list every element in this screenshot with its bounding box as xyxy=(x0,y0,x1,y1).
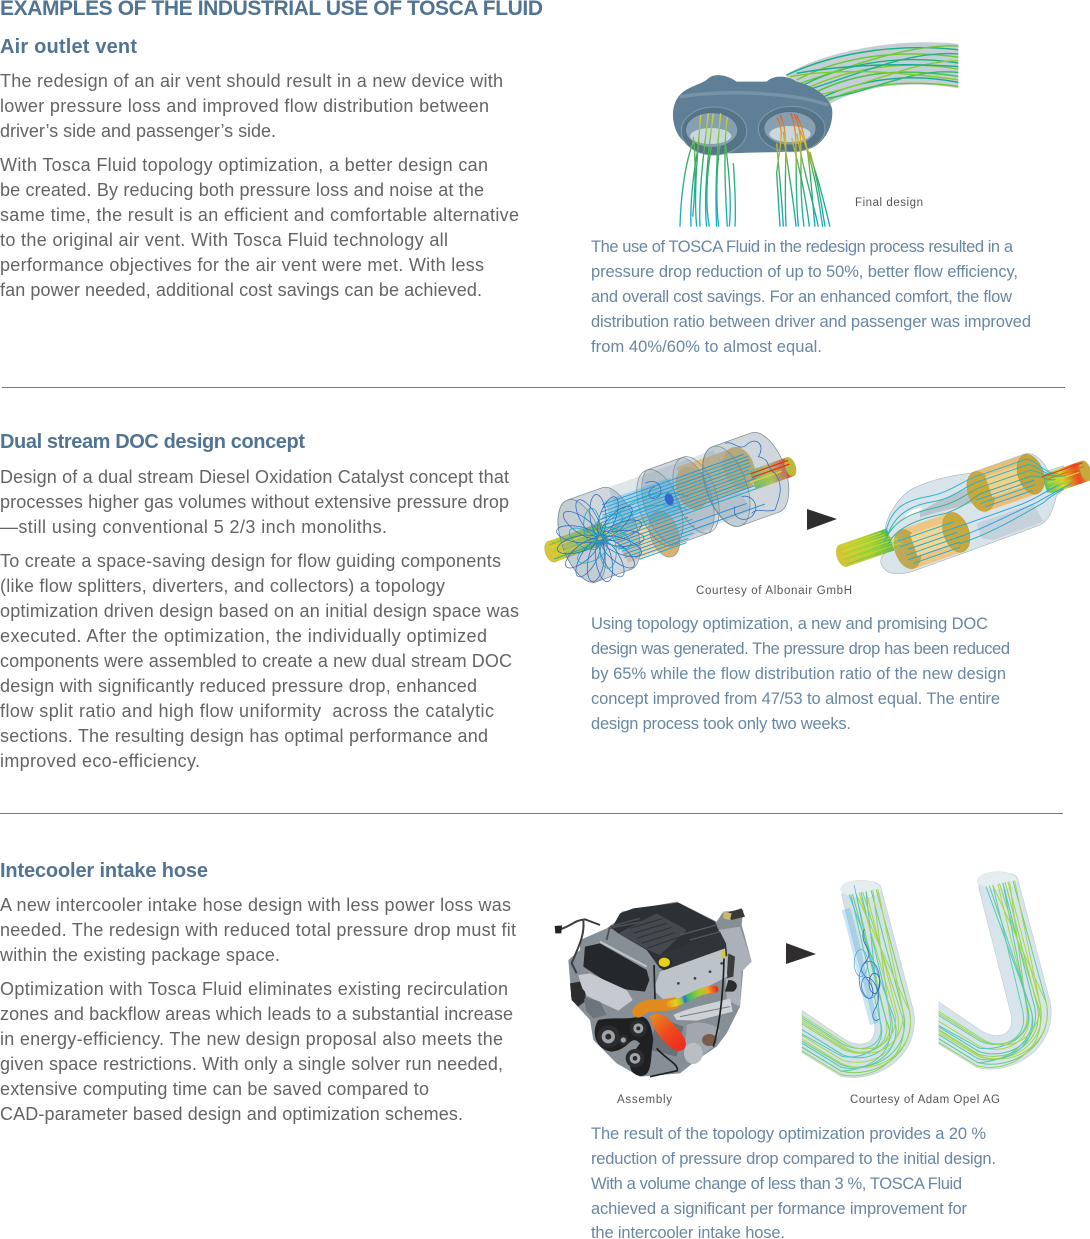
cans xyxy=(548,426,800,588)
illustration: initial DOC design xyxy=(531,423,810,595)
recirculation swirl xyxy=(846,885,880,1024)
text block: air vent description: be created. By reducing both pressure loss and noise at the xyxy=(0,180,484,200)
text block: DOC description: executed. After the optimization, the individually optimized xyxy=(0,626,487,646)
text block: hose result: achieved a significant per formance improvement for xyxy=(591,1200,968,1218)
flow lines xyxy=(542,441,803,586)
connecting light tube xyxy=(608,450,752,562)
text block: air vent description: to the original air vent. With Tosca Fluid technology all xyxy=(0,230,448,250)
text block: hose description: extensive computing time can be saved compared to xyxy=(0,1079,429,1099)
text block: DOC description: To create a space-saving design for flow guiding components xyxy=(0,551,501,571)
text block: hose description: within the existing package space. xyxy=(0,945,280,965)
lower monolith xyxy=(608,510,678,563)
outlet pipe xyxy=(1041,461,1089,495)
text block: DOC description: optimization driven design based on an initial design space was xyxy=(0,601,519,621)
wiring xyxy=(560,919,600,973)
text block: air vent description: same time, the result is an efficient and comfortable alternative xyxy=(0,205,519,225)
text block: DOC description: (like flow splitters, diverters, and collectors) a topology xyxy=(0,576,445,596)
turbo and sump xyxy=(685,1023,720,1060)
text block: DOC description: components were assembled to create a new dual stream DOC xyxy=(0,651,512,671)
heading: air outlet vent: Air outlet vent xyxy=(0,36,137,58)
text block: hose description: Optimization with Tosca Fluid eliminates existing recirculation xyxy=(0,979,508,999)
section: air outlet vent xyxy=(0,36,1031,356)
hose xyxy=(638,1003,674,1012)
text block: air vent description: lower pressure loss and improved flow distribution between xyxy=(0,96,489,116)
text block: DOC result: by 65% while the flow distribution ratio of the new design xyxy=(591,665,1006,683)
text block: DOC description: design with significantly reduced pressure drop, enhanced xyxy=(0,676,477,696)
section: intercooler intake hose xyxy=(0,860,1051,1239)
section: dual stream DOC xyxy=(0,423,1090,771)
text block: DOC result: design process took only two weeks. xyxy=(591,715,851,733)
text block: hose description: needed. The redesign with reduced total pressure drop must fit xyxy=(0,920,516,940)
text block: air vent description: With Tosca Fluid topology optimization, a better design can xyxy=(0,155,488,175)
pipes xyxy=(548,522,609,562)
text block: air vent description: performance objectives for the air vent were met. With less xyxy=(0,255,484,275)
text block: DOC description: Design of a dual stream Diesel Oxidation Catalyst concept that xyxy=(0,467,509,487)
oil cap xyxy=(658,957,672,969)
arrow: DOC process xyxy=(807,509,837,530)
caption: courtesy of Albonair: Courtesy of Albonair GmbH xyxy=(696,585,852,597)
caption: assembly: Assembly xyxy=(617,1094,672,1106)
gap in housing xyxy=(904,508,923,518)
illustration: hose final design xyxy=(939,872,1051,1069)
valve cover xyxy=(583,943,649,992)
heading: dual stream DOC: Dual stream DOC design concept xyxy=(0,431,305,453)
text block: air vent description: fan power needed, additional cost savings can be achieved. xyxy=(0,280,482,300)
text block: air vent result: pressure drop reduction of up to 50%, better flow efficiency, xyxy=(591,263,1018,281)
text block: hose description: given space restrictions. With only a single solver run needed, xyxy=(0,1054,503,1074)
text block: DOC description: —still using conventional 5 2/3 inch monoliths. xyxy=(0,517,387,537)
illustration: air vent final design xyxy=(673,42,960,227)
text block: hose result: The result of the topology optimization provides a 20 % xyxy=(591,1125,986,1143)
silver block xyxy=(653,948,727,1003)
heading: intercooler intake hose: Intecooler intake hose xyxy=(0,860,208,882)
streamlines left xyxy=(680,113,735,227)
text block: hose description: in energy-efficiency. The new design proposal also meets the xyxy=(0,1029,503,1049)
illustration: final DOC design xyxy=(825,436,1090,591)
text block: air vent description xyxy=(0,71,519,300)
text block: hose description xyxy=(0,895,516,1124)
text block: DOC description: sections. The resulting design has optimal performance and xyxy=(0,726,488,746)
illustration: engine assembly xyxy=(555,902,752,1077)
text block: air vent description: The redesign of an air vent should result in a new device with xyxy=(0,71,503,91)
text block: DOC description xyxy=(0,467,519,771)
text block: DOC result xyxy=(591,615,1010,733)
vent body xyxy=(673,75,832,153)
upper monolith xyxy=(677,446,753,509)
housing xyxy=(881,453,1070,574)
text block: DOC description: improved eco-efficiency. xyxy=(0,751,200,771)
text block: hose description: zones and backflow areas which leads to a substantial increase xyxy=(0,1004,513,1024)
text block: DOC description: processes higher gas volumes without extensive pressure drop xyxy=(0,492,509,512)
inlet pipe xyxy=(840,528,894,567)
swirl lines xyxy=(555,441,780,583)
illustration: hose initial design xyxy=(802,880,914,1078)
text block: air vent description: driver’s side and passenger’s side. xyxy=(0,121,276,141)
text block: hose description: CAD-parameter based design and optimization schemes. xyxy=(0,1104,463,1124)
text block: hose result: reduction of pressure drop compared to the initial design. xyxy=(591,1150,996,1168)
arrow: hose process xyxy=(786,943,816,964)
streamlines right xyxy=(777,113,830,227)
text block: hose description: A new intercooler intake hose design with less power loss was xyxy=(0,895,511,915)
lower monolith xyxy=(901,513,963,569)
text block: air vent result xyxy=(591,238,1031,356)
text block: DOC result: concept improved from 47/53 to almost equal. The entire xyxy=(591,690,1000,708)
text block: DOC result: Using topology optimization, a new and promising DOC xyxy=(591,615,988,633)
flow lines xyxy=(833,442,1090,584)
belts and pulleys xyxy=(595,1016,653,1076)
text block: air vent result: The use of TOSCA Fluid in the redesign process resulted in a xyxy=(591,238,1014,256)
text block: air vent result: from 40%/60% to almost equal. xyxy=(591,338,822,356)
engine silhouette xyxy=(568,902,752,1077)
text block: DOC description: flow split ratio and high flow uniformity across the catalytic xyxy=(0,701,494,721)
text block: air vent result: distribution ratio between driver and passenger was improved xyxy=(591,313,1031,331)
caption: final design: Final design xyxy=(855,197,923,209)
text block: DOC result: design was generated. The pressure drop has been reduced xyxy=(591,640,1010,658)
right side parts xyxy=(718,927,752,1007)
text block: hose result xyxy=(591,1125,996,1239)
text block: air vent result: and overall cost savings. For an enhanced comfort, the flow xyxy=(591,288,1012,306)
upper monolith xyxy=(974,455,1037,511)
exhaust manifold xyxy=(673,998,733,1021)
caption: courtesy of Adam Opel: Courtesy of Adam Opel AG xyxy=(850,1094,1000,1106)
top cover xyxy=(612,903,720,968)
text block: hose result: With a volume change of less than 3 %, TOSCA Fluid xyxy=(591,1175,962,1193)
